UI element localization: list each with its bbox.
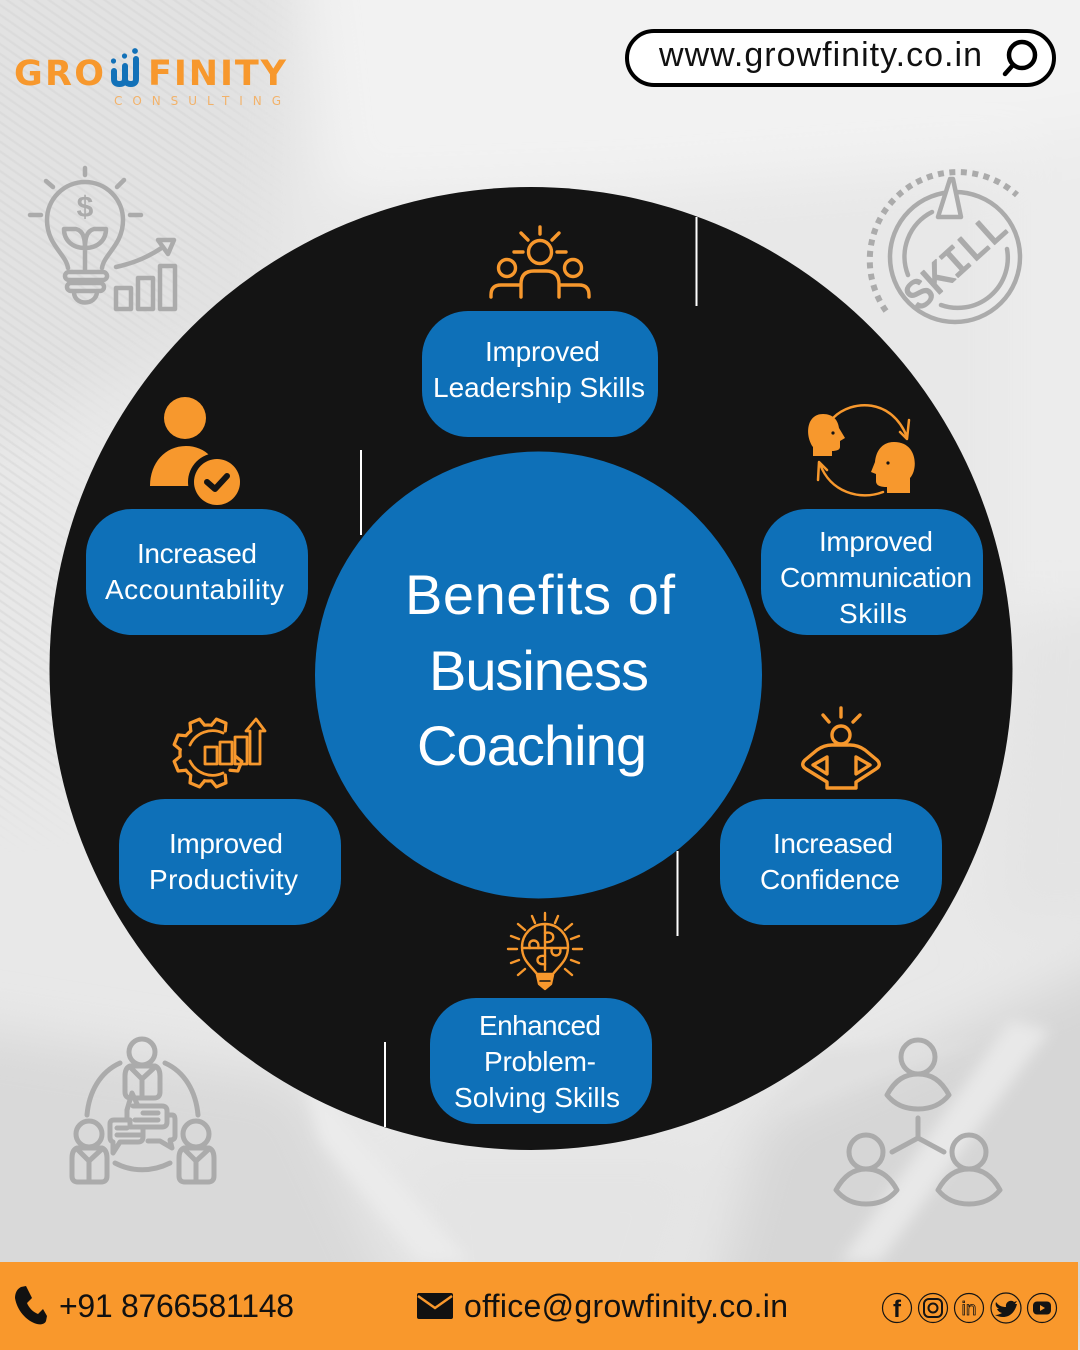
divider lines bbox=[361, 217, 696, 1127]
icon: connected people network bbox=[836, 1040, 1000, 1204]
icon: facebook: f bbox=[893, 1296, 902, 1323]
center circle: Benefits of Business Coaching bbox=[315, 452, 762, 898]
panel: improved leadership skills bbox=[422, 227, 658, 437]
icon: person with check bbox=[150, 397, 246, 511]
panel: enhanced problem-solving skills bbox=[430, 913, 652, 1124]
icon: linkedin: in bbox=[962, 1299, 976, 1320]
social media icons bbox=[882, 1293, 1056, 1323]
panel: increased accountability: Accountability bbox=[105, 574, 284, 605]
icon: team discussion bbox=[72, 1039, 214, 1182]
icon: lightbulb with growth chart: $ bbox=[77, 191, 94, 224]
logo: Growfinity Consulting: FINITY bbox=[148, 54, 287, 94]
pill bbox=[720, 799, 942, 925]
center circle: Benefits of Business Coaching: Coaching bbox=[417, 714, 647, 777]
main black circle bbox=[50, 187, 1012, 1150]
icon: leader with team bbox=[491, 227, 589, 297]
icon: envelope bbox=[417, 1293, 453, 1319]
logo: Growfinity Consulting: GRO bbox=[14, 54, 104, 94]
icon: phone bbox=[15, 1286, 47, 1324]
logo: Growfinity Consulting bbox=[14, 48, 287, 108]
pill bbox=[430, 998, 652, 1124]
pill bbox=[86, 509, 308, 635]
icon: linkedin bbox=[954, 1294, 984, 1322]
pill bbox=[422, 311, 658, 437]
panel: improved leadership skills: Improved bbox=[485, 336, 600, 367]
panel: improved productivity bbox=[119, 716, 341, 925]
panel: increased confidence: Increased bbox=[773, 828, 893, 859]
panel: improved communication skills: Improved bbox=[819, 526, 933, 557]
panel: improved productivity: Productivity bbox=[149, 864, 298, 895]
icon: two heads exchanging bbox=[808, 405, 915, 495]
panel: improved communication skills: Skills bbox=[839, 598, 907, 629]
icon: facebook bbox=[882, 1294, 912, 1323]
footer contact bar bbox=[0, 1262, 1078, 1350]
heading: Benefits of bbox=[405, 563, 675, 626]
website search bar: www.growfinity.co.in bbox=[658, 36, 982, 74]
panel: increased confidence bbox=[720, 708, 942, 925]
email address: office@growfinity.co.in bbox=[464, 1288, 788, 1324]
logo mark: blue w with dots bbox=[111, 48, 138, 84]
phone number: +91 8766581148 bbox=[59, 1288, 294, 1324]
icon: lightbulb with growth chart bbox=[30, 168, 175, 309]
icon: gear with rising bars bbox=[171, 716, 265, 790]
icon: skill dial bbox=[870, 172, 1020, 322]
icon: youtube bbox=[1028, 1294, 1056, 1322]
icon: search magnifier bbox=[1005, 42, 1035, 74]
panel: increased confidence: Confidence bbox=[760, 864, 900, 895]
pill bbox=[761, 509, 983, 635]
panel: improved leadership skills: Leadership Skills bbox=[433, 372, 645, 403]
panel: enhanced problem-solving skills: Solving Skills bbox=[454, 1082, 620, 1113]
panel: enhanced problem-solving skills: Enhanced bbox=[479, 1010, 601, 1041]
panel: increased accountability bbox=[86, 397, 308, 635]
website search bar bbox=[627, 31, 1054, 85]
panel: improved productivity: Improved bbox=[169, 828, 283, 859]
panel: improved communication skills bbox=[761, 405, 983, 635]
icon: skill dial: SKILL bbox=[896, 205, 1018, 322]
icon: confident person bbox=[803, 708, 879, 788]
panel: improved communication skills: Communication bbox=[780, 562, 972, 593]
icon: puzzle lightbulb bbox=[508, 913, 582, 989]
icon: instagram bbox=[918, 1294, 948, 1322]
icon: twitter bbox=[991, 1293, 1021, 1323]
panel: increased accountability: Increased bbox=[137, 538, 257, 569]
pill bbox=[119, 799, 341, 925]
center circle: Benefits of Business Coaching: Business bbox=[429, 639, 649, 702]
logo: Growfinity Consulting: CONSULTING bbox=[114, 94, 281, 108]
panel: enhanced problem-solving skills: Problem- bbox=[484, 1046, 596, 1077]
